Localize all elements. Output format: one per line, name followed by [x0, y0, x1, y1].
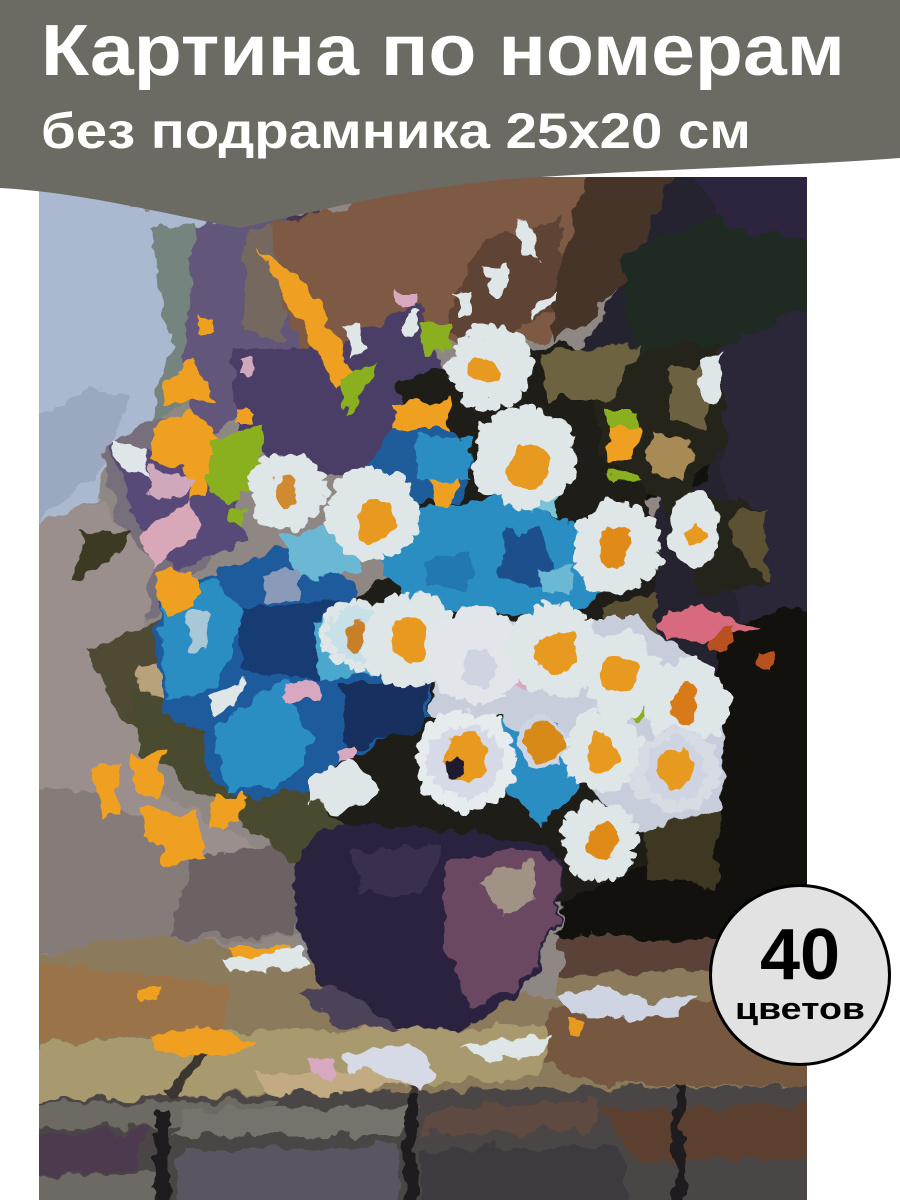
- badge: 40 colours: [710, 886, 890, 1064]
- daisy 17: [564, 806, 636, 878]
- fallen petals on table: [225, 945, 695, 1090]
- bouquet: blue patch among daisies: [505, 720, 575, 825]
- panel: painting: [20, 165, 825, 1200]
- daisy 12: [647, 660, 723, 744]
- daisy 9: [431, 607, 519, 703]
- bouquet: white buds: [205, 218, 725, 815]
- foliage: tan leaf tips: [134, 664, 164, 698]
- title: Картина по номерам: [41, 10, 845, 91]
- daisy 14: [518, 714, 566, 770]
- bouquet: pink and lilac accents: [110, 292, 772, 762]
- foliage: purple sprigs: [230, 300, 450, 480]
- header banner: [0, 0, 900, 228]
- background: brown wall: [270, 165, 680, 350]
- daisy 1: [448, 332, 532, 404]
- foliage: olive leaves: [86, 620, 160, 725]
- daisies: [254, 332, 723, 878]
- bouquet: green leaves: [205, 320, 652, 722]
- table top: [20, 935, 825, 1105]
- badge label: цветов: [735, 991, 865, 1026]
- bouquet: orange flowers: [92, 248, 638, 1055]
- daisy 2: [479, 414, 571, 502]
- background: dark right wall: [560, 165, 825, 950]
- background: light blue wall: [39, 191, 216, 524]
- daisy 4: [330, 475, 414, 555]
- daisy 7: [320, 603, 396, 667]
- subtitle: без подрамника 25х20 см: [41, 103, 751, 159]
- daisy 15: [567, 712, 639, 792]
- daisy 11: [582, 635, 658, 715]
- foliage: dark undergrowth behind bouquet: [280, 340, 720, 900]
- daisy 6: [670, 492, 720, 568]
- daisy 3: [254, 456, 322, 524]
- daisy 8: [368, 598, 452, 682]
- badge number: 40: [760, 915, 840, 995]
- daisy 13: [419, 716, 511, 808]
- bouquet: lavender petal mass: [430, 620, 725, 830]
- daisy 5: [579, 502, 655, 594]
- table front: [20, 1085, 825, 1200]
- vase: [293, 824, 561, 1030]
- daisy 10: [513, 608, 597, 692]
- bouquet: blue cornflowers: [155, 425, 605, 820]
- background: left grey wall: [39, 501, 256, 856]
- daisy 16: [638, 726, 714, 814]
